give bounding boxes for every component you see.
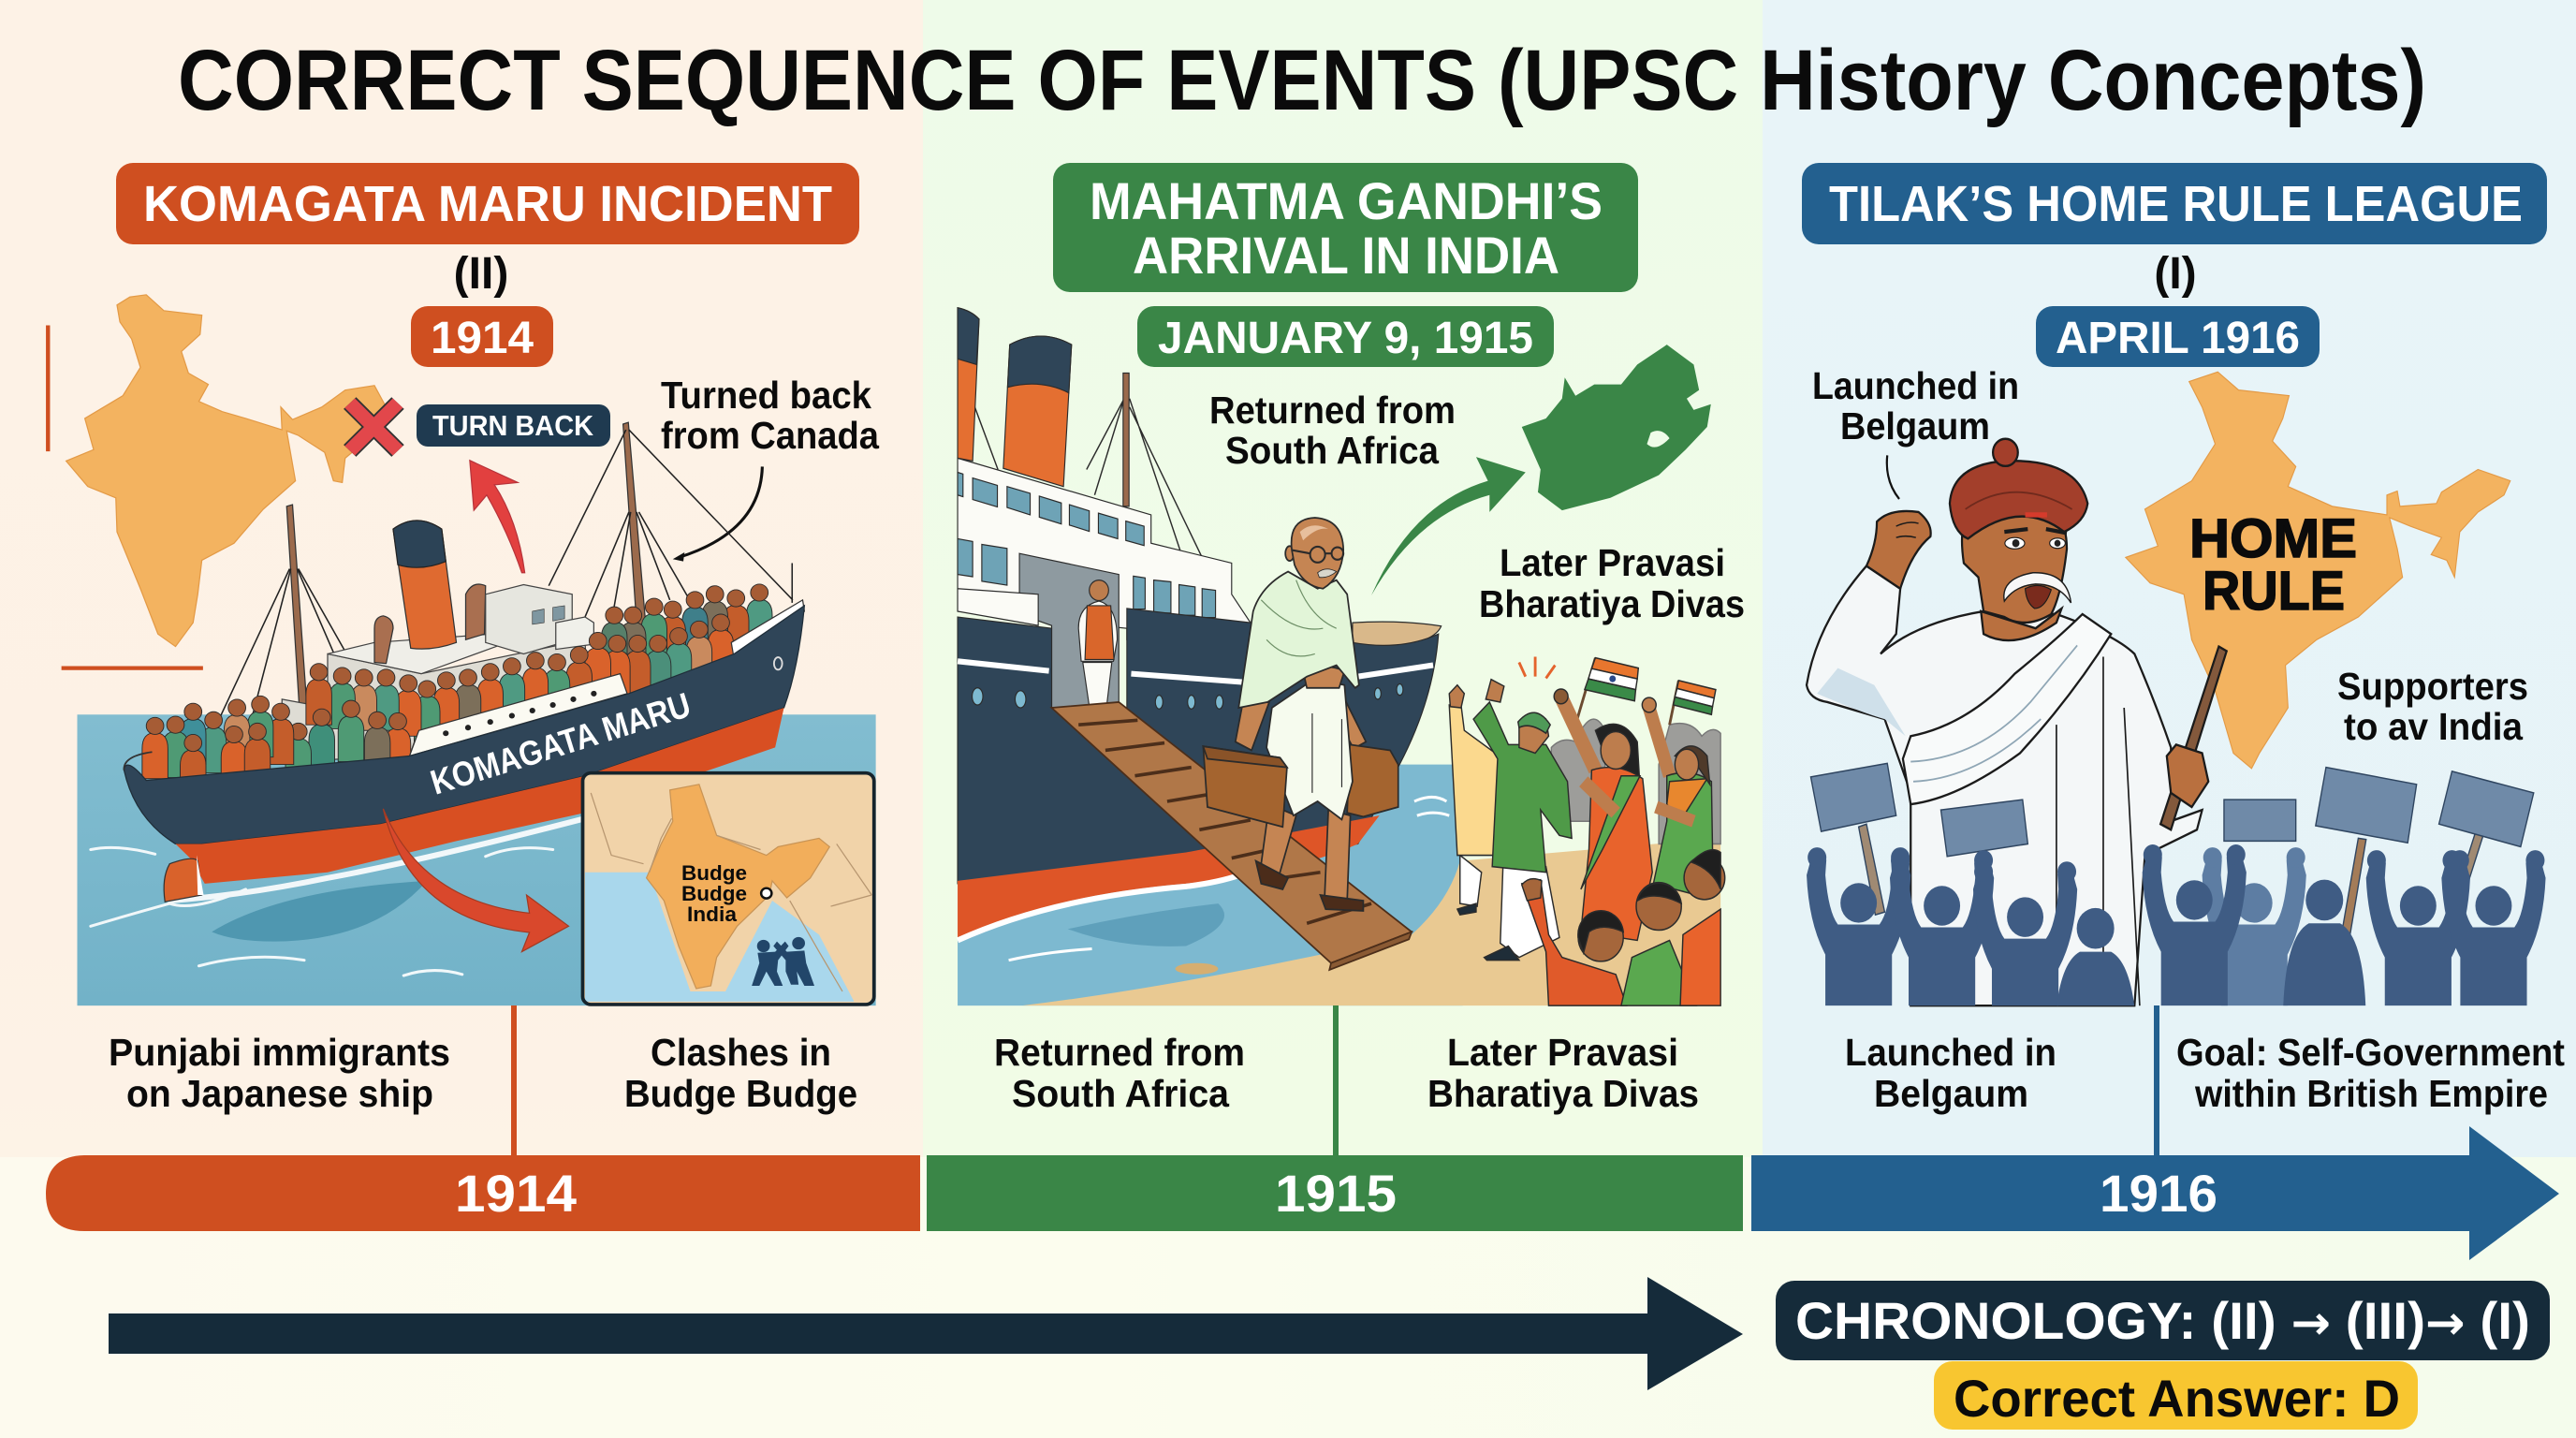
arrow: callout to ship [679, 466, 762, 557]
panel: Tilak's Home Rule League [1802, 163, 2547, 1057]
illustration: India map, Tilak and supporters [1807, 372, 2546, 1057]
annotation: later Pravasi Bharatiya Divas: Bharatiya Divas [1479, 582, 1745, 625]
man in green kurta [1500, 867, 1559, 958]
doorway figure [1078, 580, 1118, 722]
bar arrow 1916: 1916 [2100, 1164, 2217, 1223]
Tilak figure [1807, 439, 2227, 1005]
date badge January 9, 1915: JANUARY 9, 1915 [1158, 314, 1533, 363]
woman in orange sari [1562, 699, 1595, 770]
illustration: ship, Gandhi and crowd [958, 308, 1725, 1005]
sea [77, 714, 876, 1005]
passengers on stern deck [142, 696, 411, 796]
date badge April 1916: APRIL 1916 [2056, 314, 2300, 363]
captions 1915: Returned from [994, 1031, 1245, 1074]
annotation: supporters: Supporters [2337, 665, 2528, 708]
map: South Africa [1522, 345, 1711, 510]
Gandhi figure [1203, 518, 1398, 911]
annotation: turned back from Canada: Turned back [661, 374, 871, 417]
arrow: red to Budge Budge [383, 809, 569, 952]
heading: Komagata Maru: KOMAGATA MARU INCIDENT [143, 176, 832, 232]
sea and sand [958, 765, 1720, 1005]
icon: clash figures [752, 937, 814, 986]
captions 1915 [994, 1031, 1699, 1115]
connector lines [511, 1005, 2159, 1157]
captions 1916: Launched in [1845, 1031, 2056, 1074]
heading: Mahatma Gandhi: ARRIVAL IN INDIA [1133, 226, 1559, 285]
captions 1916: within British Empire [2194, 1072, 2548, 1115]
arrow: chronology direction [109, 1277, 1743, 1390]
annotation: launched in Belgaum: Belgaum [1840, 404, 1990, 448]
annotation: turned back from Canada: from Canada [661, 414, 880, 457]
statement number I: (I) [2154, 249, 2197, 299]
heading: Mahatma Gandhi [1053, 163, 1638, 292]
woman in green sari [1649, 708, 1670, 776]
heading: Komagata Maru [116, 163, 859, 244]
arrow: red turn back [470, 461, 525, 573]
timeline [46, 1005, 2565, 1260]
heading: Mahatma Gandhi: MAHATMA GANDHI’S [1090, 171, 1603, 230]
annotation: returned from South Africa: Returned from [1209, 389, 1456, 432]
panel: Komagata Maru incident [48, 163, 880, 1005]
inset map: Budge Budge [582, 773, 874, 1005]
heading: Tilak: TILAK’S HOME RULE LEAGUE [1829, 176, 2523, 232]
flags [1575, 658, 1716, 725]
map label: Home Rule [2189, 508, 2357, 622]
liner ship [958, 308, 1442, 940]
panel: Gandhi's arrival [958, 163, 1745, 1005]
captions 1914: Clashes in [651, 1031, 831, 1074]
bar segment 1914 [46, 1155, 920, 1231]
captions 1916: Belgaum [1874, 1072, 2028, 1115]
sea waves [91, 818, 585, 976]
inset map labels: Budge [681, 882, 747, 905]
captions 1915: Later Pravasi [1447, 1031, 1678, 1074]
date badge 1914 [411, 306, 553, 367]
illustration: India map, ship and inset [48, 295, 876, 1005]
map label: Home Rule: HOME [2189, 508, 2357, 569]
gangway [1052, 702, 1412, 970]
captions 1914 [109, 1031, 857, 1115]
captions 1915: Bharatiya Divas [1427, 1072, 1699, 1115]
supporter silhouettes [1807, 844, 2546, 1005]
date badge 1914: 1914 [431, 314, 534, 363]
chronology box: CHRONOLOGY: (II) → (III)→ (I) [1795, 1291, 2530, 1350]
captions 1914: Punjabi immigrants [109, 1031, 450, 1074]
annotation: returned from South Africa [1209, 389, 1456, 472]
bar segment 1915 [927, 1155, 1743, 1231]
foreground people [1522, 850, 1725, 1005]
bar segment 1914: 1914 [455, 1164, 577, 1223]
annotation: later Pravasi Bharatiya Divas: Later Pravasi [1500, 541, 1725, 584]
ship [124, 422, 804, 902]
icon: red cross [350, 404, 398, 450]
passengers on mid deck [306, 647, 592, 741]
bar arrow 1916 [1751, 1126, 2559, 1260]
welcoming crowd [1449, 656, 1725, 1005]
icon: India map [66, 295, 386, 647]
label: turn back: TURN BACK [432, 409, 594, 442]
annotation: turned back from Canada [661, 374, 880, 457]
annotation: later Pravasi Bharatiya Divas [1479, 541, 1745, 625]
captions 1916 [1845, 1031, 2565, 1115]
correct answer badge: Correct Answer: D [1954, 1369, 2400, 1428]
inset map labels: India [687, 902, 738, 926]
annotation: supporters [2337, 665, 2528, 748]
captions 1915: South Africa [1012, 1072, 1230, 1115]
annotation: launched in Belgaum: Launched in [1812, 364, 2019, 407]
annotation: supporters: to av India [2344, 705, 2524, 748]
supporter placards [1810, 763, 2534, 994]
annotation: returned from South Africa: South Africa [1225, 429, 1440, 472]
statement number II: (II) [454, 249, 508, 299]
heading: Tilak [1802, 163, 2547, 244]
captions 1914: Budge Budge [624, 1072, 857, 1115]
ship name: KOMAGATA MARU [426, 685, 695, 802]
captions 1914: on Japanese ship [126, 1072, 433, 1115]
callout stroke to Tilak [1887, 455, 1899, 499]
map: India [2126, 372, 2510, 769]
annotation: launched in Belgaum [1812, 364, 2019, 448]
inset map labels [681, 861, 747, 926]
inset map labels: Budge [681, 861, 747, 885]
map label: Home Rule: RULE [2203, 561, 2345, 622]
sea shadow [212, 881, 427, 942]
bar segment 1915: 1915 [1275, 1164, 1397, 1223]
decorative map axis [48, 326, 203, 668]
passengers on bow deck [585, 584, 772, 697]
man in yellow kurta [1460, 856, 1482, 906]
arrow: to South Africa [1371, 457, 1526, 595]
label: turn back [417, 404, 610, 447]
